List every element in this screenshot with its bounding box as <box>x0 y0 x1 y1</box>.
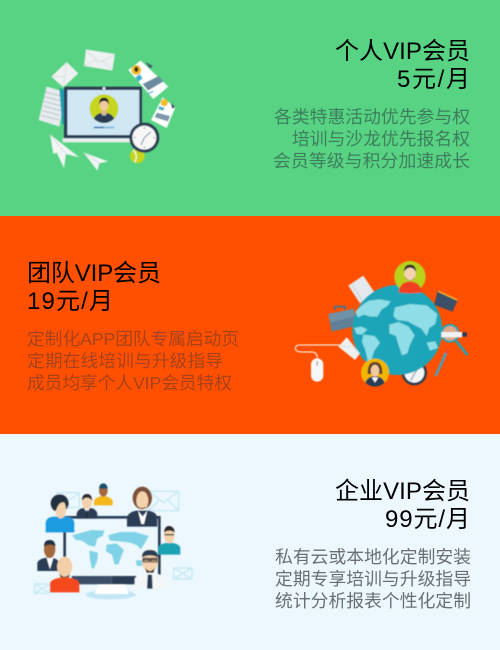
icon: notebook <box>39 87 65 127</box>
heading: enterprise VIP price: 99元/月 <box>385 506 470 533</box>
monitor <box>65 517 159 599</box>
text block: team VIP benefits: 定期在线培训与升级指导 <box>27 351 223 371</box>
icon: paper plane small <box>83 152 108 171</box>
person: man in bow tie <box>37 540 59 571</box>
icon: envelope top <box>84 49 115 71</box>
illustration: laptop with mail and documents <box>39 49 175 171</box>
icons: background envelopes <box>35 491 192 593</box>
avatar: man in red <box>394 261 426 293</box>
icon: notebook <box>348 276 374 303</box>
heading: team VIP name: 团队VIP会员 <box>27 260 161 287</box>
text block: enterprise VIP benefits: 统计分析报表个性化定制 <box>275 591 471 611</box>
icon: tennis ball <box>130 149 145 163</box>
icon: envelope <box>338 337 360 360</box>
icon: laptop <box>59 87 142 142</box>
icon: clock <box>129 123 159 153</box>
world map <box>72 530 149 569</box>
person: man with glasses in teal <box>158 526 180 555</box>
person: woman in blue <box>46 494 74 532</box>
illustration: monitor with people <box>35 483 192 599</box>
person: bald man in red <box>50 557 79 592</box>
heading: personal VIP name: 个人VIP会员 <box>335 38 470 65</box>
icon: document large <box>128 61 168 99</box>
person: man in suit <box>77 494 97 519</box>
icon: pencil <box>436 350 448 376</box>
person: man in yellow <box>94 483 113 505</box>
heading: enterprise VIP name: 企业VIP会员 <box>335 478 470 505</box>
icon: envelope left <box>51 62 78 87</box>
person: woman with headset <box>127 487 157 527</box>
avatar: man in suit <box>90 94 118 123</box>
heading: personal VIP price: 5元/月 <box>397 66 470 93</box>
icon: magnifier <box>441 325 467 355</box>
avatar: woman with headset <box>361 359 389 387</box>
text block: personal VIP benefits: 会员等级与积分加速成长 <box>273 151 470 171</box>
icon: computer mouse <box>295 345 340 382</box>
person: man with glasses and tie <box>135 549 167 589</box>
text block: enterprise VIP benefits: 定期专享培训与升级指导 <box>275 569 471 589</box>
icon: document small <box>151 97 175 128</box>
panel: enterprise VIP <box>0 434 500 650</box>
illustration: globe with team <box>295 261 467 387</box>
text block: enterprise VIP benefits <box>275 547 471 611</box>
text block: personal VIP benefits <box>273 107 470 171</box>
heading: team VIP price: 19元/月 <box>27 288 113 315</box>
icon: paper plane large <box>50 134 79 168</box>
text block: enterprise VIP benefits: 私有云或本地化定制安装 <box>275 547 471 567</box>
icon: briefcase <box>328 307 356 332</box>
icon: folder <box>434 291 458 312</box>
icon: clock <box>402 360 427 385</box>
text block: team VIP benefits <box>27 329 239 393</box>
text block: personal VIP benefits: 培训与沙龙优先报名权 <box>292 129 470 149</box>
text block: personal VIP benefits: 各类特惠活动优先参与权 <box>274 107 470 127</box>
text block: team VIP benefits: 成员均享个人VIP会员特权 <box>27 373 232 393</box>
panel: team VIP <box>0 216 500 434</box>
globe <box>352 285 442 375</box>
text block: team VIP benefits: 定制化APP团队专属启动页 <box>27 329 239 349</box>
panel: personal VIP <box>0 0 500 216</box>
